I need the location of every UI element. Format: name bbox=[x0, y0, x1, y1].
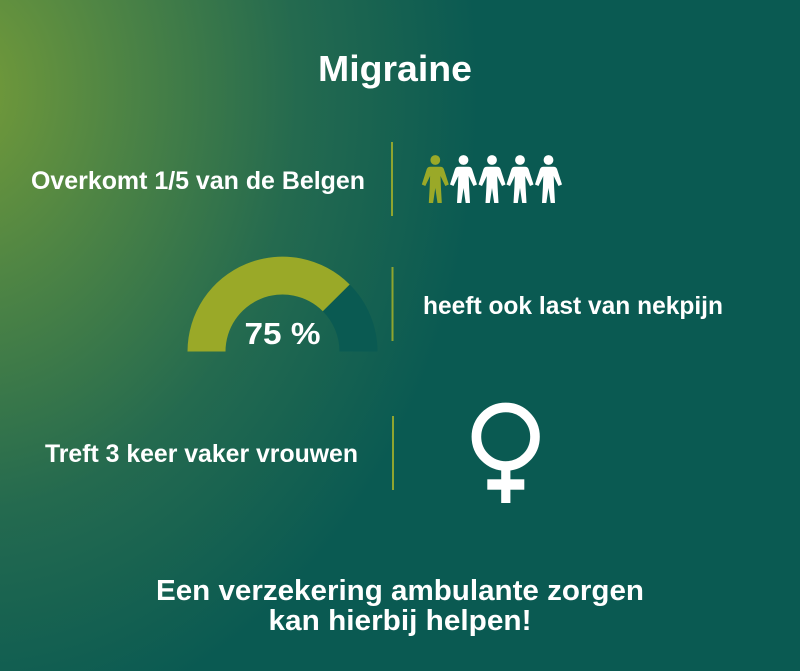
gauge value: 75 % bbox=[244, 316, 320, 351]
text: overkomt 1/5 van de Belgen: Overkomt 1/5 van de Belgen bbox=[31, 167, 365, 195]
panel: women row bbox=[45, 407, 535, 503]
icon: female symbol bbox=[476, 407, 535, 503]
title: Migraine bbox=[318, 48, 472, 89]
closing message: Een verzekering ambulante zorgen bbox=[156, 575, 644, 607]
divider: prevalence bbox=[391, 142, 393, 216]
divider: neck pain bbox=[392, 267, 394, 341]
panel: prevalence row bbox=[31, 142, 562, 216]
text: heeft ook last van nekpijn: heeft ook last van nekpijn bbox=[423, 292, 723, 320]
closing message: kan hierbij helpen! bbox=[268, 605, 532, 637]
text: treft 3 keer vaker vrouwen: Treft 3 keer vaker vrouwen bbox=[45, 440, 358, 468]
icon: five people, one highlighted bbox=[422, 155, 562, 203]
closing message bbox=[156, 575, 644, 637]
chart: 75 percent gauge bbox=[188, 257, 378, 352]
divider: women bbox=[392, 416, 394, 490]
panel: neck pain row bbox=[188, 257, 723, 352]
